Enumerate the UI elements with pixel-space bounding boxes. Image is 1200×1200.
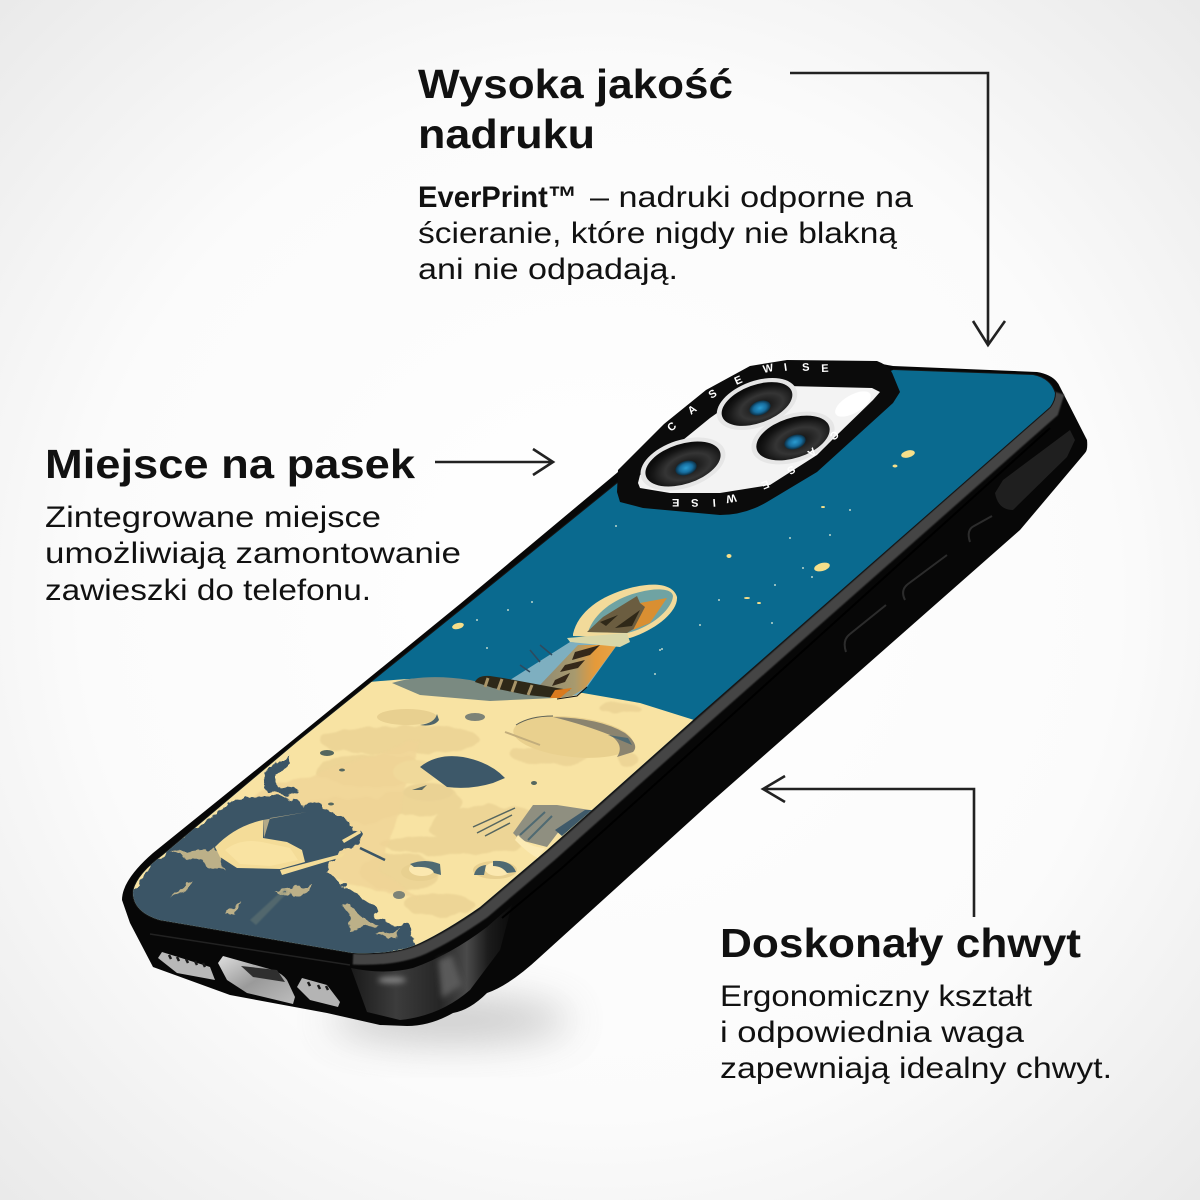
crater: striped top bbox=[504, 716, 636, 758]
callout: print quality bbox=[418, 61, 913, 286]
star dust bbox=[476, 509, 851, 675]
brand text top: CASEWISE bbox=[665, 362, 829, 434]
body text: Ergonomiczny kształt bbox=[720, 980, 1033, 1013]
astronaut cat bbox=[475, 585, 677, 699]
heading bbox=[418, 61, 733, 157]
camera window bbox=[638, 386, 880, 493]
body text bbox=[720, 980, 1112, 1085]
bezel: side groove bbox=[502, 428, 1050, 918]
body text: – nadruki odporne na bbox=[590, 181, 913, 214]
moon blotches bbox=[295, 703, 642, 917]
body text: Zintegrowane miejsce bbox=[45, 501, 381, 534]
suit body bbox=[510, 642, 617, 698]
side buttons bbox=[845, 516, 992, 652]
camera island bbox=[617, 360, 900, 515]
island frame bbox=[617, 360, 900, 515]
screen bezel line bbox=[133, 370, 1055, 953]
flash bbox=[831, 386, 875, 422]
body text: ani nie odpadają. bbox=[418, 253, 678, 286]
body text: EverPrint™ bbox=[418, 181, 577, 214]
heading: Doskonały chwyt bbox=[720, 920, 1081, 966]
body text: zawieszki do telefonu. bbox=[45, 574, 371, 607]
small craters bbox=[320, 709, 537, 899]
body text: umożliwiają zamontowanie bbox=[45, 537, 461, 570]
brand text bottom: CASEWISE bbox=[672, 428, 841, 508]
bezel: grey band bbox=[353, 393, 1059, 959]
dark streak bbox=[263, 758, 300, 797]
callout: strap slot bbox=[45, 441, 461, 607]
strap slot bbox=[995, 430, 1075, 510]
phone shadow bbox=[330, 998, 570, 1042]
crater: lower right bbox=[473, 805, 592, 858]
heading: Miejsce na pasek bbox=[45, 441, 415, 487]
bezel: lower edge bbox=[150, 934, 350, 965]
phone case bbox=[100, 350, 1100, 1026]
tail bbox=[475, 676, 570, 698]
moon shadow bbox=[392, 677, 555, 701]
case body bbox=[122, 363, 1087, 1026]
speaker grille left bbox=[158, 952, 215, 980]
dark lunar region bbox=[133, 794, 416, 954]
body text bbox=[45, 501, 461, 607]
helmet bbox=[573, 585, 677, 638]
arrow: print quality bbox=[790, 73, 1005, 345]
helmet glass bbox=[588, 589, 673, 633]
sky bbox=[133, 370, 1055, 954]
heading: nadruku bbox=[418, 111, 595, 157]
tan flecks in dark area bbox=[170, 847, 400, 940]
charging port bbox=[218, 956, 295, 1004]
arrow: grip bbox=[763, 776, 974, 917]
crater: dark centre bbox=[404, 756, 505, 792]
body text: i odpowiednia waga bbox=[720, 1016, 1024, 1049]
arrow: strap slot bbox=[435, 449, 553, 475]
glossy corner bbox=[351, 905, 512, 1020]
collar bbox=[567, 633, 630, 647]
corner highlights bbox=[378, 955, 462, 998]
lens 3 bbox=[634, 428, 732, 500]
large crater bbox=[215, 812, 385, 875]
callout: grip bbox=[720, 920, 1112, 1085]
lens 2 bbox=[745, 402, 841, 474]
stars bbox=[451, 449, 916, 630]
printed back bbox=[133, 370, 1055, 954]
fur bbox=[540, 645, 617, 698]
heading: Wysoka jakość bbox=[418, 61, 733, 107]
moon bbox=[133, 678, 694, 954]
body text: ścieranie, które nigdy nie blakną bbox=[418, 217, 897, 250]
cat head bbox=[587, 596, 667, 633]
body text: zapewniają idealny chwyt. bbox=[720, 1052, 1112, 1085]
lens 1 bbox=[710, 368, 804, 440]
body text bbox=[418, 181, 913, 286]
speaker grille right bbox=[297, 978, 340, 1007]
diagonal light streak bbox=[250, 888, 288, 925]
lower-left tan area bbox=[254, 752, 416, 896]
